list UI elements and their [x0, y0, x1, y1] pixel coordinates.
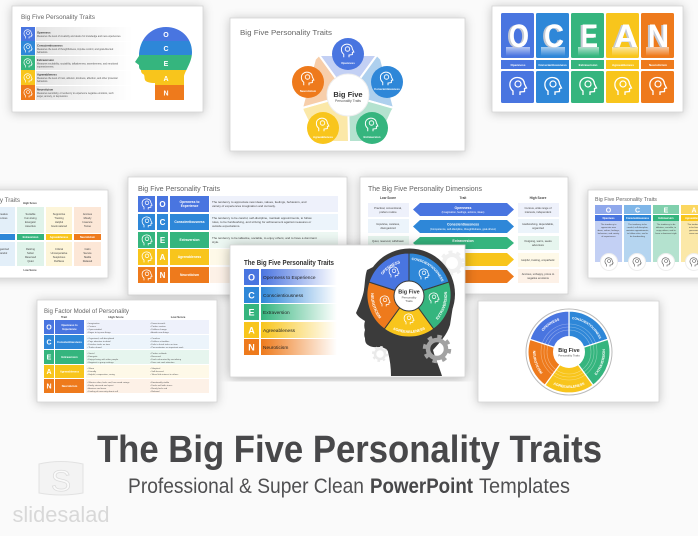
head silhouette — [356, 249, 455, 376]
trait circle: agreeableness — [307, 112, 339, 144]
gradient trait bars: Agreeableness — [263, 328, 296, 334]
row bullets: • Thinks ahead — [87, 347, 102, 349]
score text: Quiet, reserved, withdrawn — [372, 239, 404, 243]
score labels: Agreeableness — [50, 235, 69, 239]
panel: slide circular wheel — [472, 296, 664, 408]
OCEAN letters on head: A — [163, 76, 169, 83]
segment labels: CONSCIENTIOUSNESS — [572, 317, 602, 339]
row bullets: • Dislikes schedules — [150, 341, 170, 343]
column labels — [511, 63, 667, 67]
card text: maintain appointments, — [626, 229, 649, 232]
card text: careful, self-discipline, — [627, 226, 649, 229]
OCEAN letter boxes — [244, 269, 259, 355]
score text: Outgoing, warm, seeks — [524, 239, 552, 243]
large OCEAN letters with 3D edge: E — [581, 18, 598, 54]
score labels: Fun-loving — [24, 216, 37, 220]
score labels: Anxious — [83, 212, 93, 216]
OCEAN letter boxes: N — [248, 342, 255, 352]
card text: behaviors, and variety — [598, 232, 620, 235]
segment labels — [533, 317, 605, 388]
score labels: Suspicious — [53, 255, 66, 259]
row names: Conscientiousness — [57, 340, 82, 344]
score labels: Relaxed — [83, 259, 93, 263]
large OCEAN letters with 3D edge: N — [646, 18, 667, 54]
row bullets: • Down-to-earth — [150, 322, 166, 325]
card text: ideas, values, feelings, — [597, 230, 620, 232]
row bullets: • Rarely feels sad — [150, 387, 168, 390]
OCEAN letters on head: N — [163, 90, 169, 98]
row bullets: • Open-minded — [87, 329, 102, 331]
row bullets: • Self-focused — [150, 371, 164, 373]
card letters: C — [635, 208, 640, 214]
card letters: O — [606, 208, 612, 214]
score labels: Trusting — [54, 216, 64, 220]
trait list with icons: Agreeableness — [37, 72, 57, 76]
row bullets: • Takes little interest in others — [150, 373, 179, 376]
score labels: Tense — [84, 224, 92, 228]
table rows — [138, 196, 338, 283]
score labels: Low Score — [23, 268, 37, 272]
large OCEAN letters with 3D edge: A — [614, 18, 638, 54]
row bullets: • Curious — [87, 325, 97, 328]
row descriptions: variety of experiences imagination and curiosity. — [212, 204, 276, 208]
wheel hub: Personality — [402, 296, 417, 300]
row bullets: • Warm — [87, 367, 94, 370]
card letters: A — [691, 208, 697, 214]
score labels: Extraversion — [23, 235, 39, 239]
column tiles — [501, 13, 674, 103]
row names — [57, 323, 82, 388]
card text: The tendency to be — [657, 223, 676, 226]
segment labels: OPENNESS — [542, 318, 560, 331]
card labels: Extraversion — [658, 217, 674, 220]
subtitle — [128, 475, 570, 498]
arrow labels: Openness — [455, 206, 472, 210]
score columns — [0, 207, 101, 266]
wheel segment icons — [380, 267, 439, 324]
card text: talkative, sociable, to — [656, 226, 677, 229]
column headers: Low Score — [380, 196, 396, 200]
wheel segment labels: AGREEABLENESS — [392, 327, 425, 333]
panel: slide OCEAN cards (cropped at right) — [588, 190, 698, 278]
large OCEAN letters with 3D edge: N — [648, 18, 669, 54]
score labels: Critical — [55, 247, 63, 251]
score labels — [0, 201, 96, 272]
row bullets: • Feels exhausted by socializing — [150, 358, 182, 361]
card labels: Openness — [602, 217, 615, 220]
panel: slide OCEAN columns — [492, 6, 683, 112]
center hub: Big Five — [558, 348, 580, 354]
center hub — [553, 336, 585, 368]
trait circle: agreeableness: Agreeableness — [313, 135, 333, 139]
row descriptions: The tendency to appreciate new ideas, values, feelings, behaviors, and — [212, 200, 307, 204]
wheel segments — [528, 311, 610, 393]
row bullets: • Easily stressed and upset — [87, 384, 114, 387]
row bullets: • Emotionally stable — [150, 381, 170, 384]
row names: Experience — [62, 327, 77, 331]
trait circle: neuroticism: Neuroticism — [300, 89, 317, 93]
row bullets: • Happiest in group settings — [87, 361, 115, 364]
score labels: Sociable — [26, 212, 36, 216]
column headers: High Score — [108, 315, 124, 319]
row bullets: • Enjoys being with other people — [87, 358, 119, 361]
trait circle: extraversion — [356, 112, 388, 144]
wheel hub: Traits — [405, 299, 413, 303]
card text: appreciate new — [601, 226, 616, 229]
trait circle: extraversion: Extraversion — [364, 135, 381, 139]
row letters: A — [46, 369, 52, 376]
row bullets: • Prefers solitude — [150, 352, 167, 355]
row bullets: • Eager to try new things — [87, 331, 112, 334]
row letters: C — [46, 340, 52, 346]
score text: prefers routine — [379, 210, 397, 214]
row bullets: • Energetic — [87, 355, 99, 358]
panel: slide pentagon diagram — [230, 18, 465, 151]
center hub: Personality Traits — [558, 354, 580, 358]
panel: slide personality dimensions — [360, 177, 568, 294]
column headers: Low Score — [171, 315, 186, 319]
panel: slide big factor model — [37, 300, 217, 402]
trait circle: openness: Openness — [341, 61, 355, 65]
column headers — [380, 196, 547, 200]
row letters — [46, 324, 52, 390]
row descriptions: rules, to be hardworking, and striving for achievement against measures or — [212, 220, 311, 224]
row names: Experience — [181, 204, 198, 208]
arrow labels — [430, 206, 496, 243]
row names — [174, 200, 205, 277]
row bullets: • Deals well with stress — [150, 384, 173, 387]
wheel segment labels: EXTRAVERSION — [436, 292, 448, 320]
row icons — [142, 199, 152, 280]
score labels: Ruthless — [54, 259, 65, 263]
gears — [373, 252, 463, 362]
segment labels: AGREEABLENESS — [553, 382, 584, 388]
trait list with icons: behaviors. — [37, 80, 48, 83]
trait arrows — [413, 203, 514, 283]
arrow labels: Extraversion — [452, 239, 474, 243]
gradient trait bars: Extraversion — [263, 310, 290, 316]
row names: Neuroticism — [180, 273, 199, 277]
score labels: Helpful — [55, 220, 63, 224]
row bullets: • Avoids new things — [150, 331, 170, 334]
column icons — [510, 78, 666, 95]
trait circle: openness — [332, 38, 364, 70]
OCEAN letters on head — [163, 32, 169, 98]
large OCEAN letters with 3D edge: O — [509, 18, 529, 54]
card labels: Conscientiousness — [626, 217, 650, 220]
score text: disorganized — [380, 226, 396, 230]
row bullets: • Prefers routine — [150, 325, 167, 328]
slide heading: Big Five Personality Traits — [240, 28, 332, 37]
OCEAN letter boxes: A — [248, 326, 255, 336]
row descriptions: The tendency to be talkative, sociable, to enjoy others; and to have a dominant — [212, 236, 317, 240]
column headers: Trait — [61, 315, 67, 319]
row letters: N — [46, 384, 52, 390]
column labels: Extraversion — [579, 63, 597, 67]
column labels: Conscientiousness — [538, 63, 567, 67]
row names: Extraversion — [180, 238, 199, 242]
panel: slide trait scores (cropped at left) — [0, 190, 108, 278]
row names: Conscientiousness — [174, 220, 205, 224]
center hub: Big Five — [333, 90, 363, 99]
row bullets: • Finishes tasks on time — [87, 343, 111, 346]
panel: slide head with OCEAN bands — [12, 6, 203, 112]
column labels: Openness — [511, 63, 526, 67]
score labels: Retiring — [26, 247, 36, 251]
OCEAN letter boxes: O — [248, 272, 255, 282]
score text: Curious, wide range of — [525, 206, 552, 210]
center hub — [327, 74, 369, 116]
trait circle: conscientiousness — [371, 66, 403, 98]
score labels: Reserved — [25, 255, 37, 259]
row descriptions: outside expectations. — [212, 224, 240, 228]
score labels: High Score — [23, 201, 37, 205]
large OCEAN letters with 3D edge: O — [507, 18, 527, 54]
score text: Practical, conventional, — [374, 206, 402, 210]
subtitle: Professional & Super Clean — [128, 475, 364, 498]
trait list with icons: Extraversion — [37, 58, 54, 62]
row bullets — [87, 322, 184, 393]
trait circle: conscientiousness: Conscientiousness — [374, 87, 400, 91]
card icons — [600, 254, 698, 270]
OCEAN letters on head: C — [163, 46, 169, 53]
high score boxes — [518, 203, 559, 283]
trait list with icons — [21, 27, 132, 100]
slide heading: The Big Five Personality Dimensions — [368, 186, 482, 193]
card text: have a dominant style — [655, 232, 677, 235]
slide heading: Big Five Personality Traits — [595, 197, 658, 203]
trait list with icons: behaviors. — [37, 51, 48, 54]
score text: adventure — [532, 243, 544, 247]
card text: be hardworking — [630, 235, 646, 238]
wheel segment labels — [370, 258, 448, 333]
row bullets: • Reserved — [150, 355, 162, 358]
trait list with icons: expressiveness. — [37, 66, 54, 68]
large OCEAN letters with 3D edge: C — [542, 18, 562, 54]
row bullets: • Dislikes change — [150, 329, 167, 331]
column headers: High Score — [530, 196, 547, 200]
subtitle: Templates — [479, 475, 570, 498]
column headers: Trait — [460, 196, 467, 200]
card letters — [606, 208, 697, 214]
row names: Agreeableness — [60, 370, 80, 374]
row names: Extraversion — [61, 355, 78, 359]
row bullets: • Friendly — [87, 370, 97, 373]
trait list with icons: anger, anxiety, or depression. — [37, 95, 69, 98]
score labels: Uncooperative — [51, 251, 68, 255]
column headers — [61, 315, 186, 319]
large OCEAN letters with 3D edge: E — [579, 18, 596, 54]
row bullets: • Relaxed — [150, 391, 160, 393]
wheel hub — [394, 281, 424, 311]
row letters: C — [160, 218, 166, 227]
score labels: Calm — [84, 247, 91, 251]
score text: negative emotions — [527, 276, 550, 280]
trait list with icons: Openness — [37, 30, 51, 34]
card labels — [602, 217, 698, 220]
score text: Helpful, trusting, empathetic — [521, 258, 555, 262]
trait cards — [595, 205, 698, 262]
gradient trait bars — [261, 269, 337, 355]
OCEAN letter boxes: C — [248, 290, 255, 300]
gradient trait bars: Conscientiousness — [263, 293, 304, 299]
panel: slide OCEAN table — [128, 177, 347, 295]
large OCEAN letters with 3D edge: C — [544, 18, 564, 54]
row bullets: • Helpful, cooperative, caring — [87, 373, 116, 376]
brain wheel — [364, 248, 455, 336]
row bullets: • Skeptical — [150, 367, 161, 370]
large OCEAN letters with 3D edge — [506, 18, 669, 56]
row bullets: • Anxious and tense — [87, 387, 107, 390]
row names: Neuroticism — [62, 384, 78, 388]
score labels: Neuroticism — [80, 235, 96, 239]
row letters: N — [160, 271, 166, 280]
pale detail arcs in segments — [541, 324, 597, 380]
column labels: Neuroticism — [649, 63, 667, 67]
score text — [372, 206, 555, 280]
row letters: O — [159, 200, 166, 209]
row names: Agreeableness — [178, 255, 201, 259]
score labels: Stable — [84, 255, 92, 259]
segment labels: NEUROTICISM — [533, 350, 543, 374]
score labels: Assertive — [25, 224, 36, 228]
row bullets: • Feeling of insecurity about self — [87, 390, 118, 393]
OCEAN letters on head: E — [164, 61, 169, 68]
wheel segment labels: NEUROTICISM — [370, 293, 382, 318]
slide heading: Big Factor Model of Personality — [44, 308, 130, 315]
row bullets: • Social — [87, 353, 95, 355]
row bullets: • Pays attention to detail — [87, 340, 111, 343]
wheel segment labels: OPENNESS — [381, 260, 400, 274]
row letters: E — [47, 354, 52, 362]
segment labels: EXTRAVERSION — [594, 349, 605, 376]
main title: The Big Five Personality Traits — [97, 429, 602, 471]
score labels: Good-natured — [51, 224, 68, 228]
score labels: Supportive — [53, 212, 66, 216]
gradient trait bars: Openness to Experience — [263, 275, 316, 281]
logo: slidesalad: S — [51, 465, 71, 498]
row descriptions: The tendency to be careful, self-discipline, maintain appointments, to follow — [212, 216, 313, 220]
center hub: Personality Traits — [335, 99, 361, 103]
score labels: Moody — [84, 216, 92, 220]
card text: The tendency to — [601, 223, 617, 226]
score text: interests, independent — [525, 210, 551, 214]
trait list with icons: Measures the level of trust, altruism, kindness, affection, and other prosocial — [37, 77, 118, 80]
trait list with icons: Measures the level of thoughtfulness, impulse control, and goal-directed — [37, 48, 114, 51]
row names: Openness to — [180, 200, 199, 204]
card text: The tendency to be — [628, 223, 648, 226]
table rows — [44, 320, 209, 393]
logo: slidesalad: slidesalad — [12, 502, 110, 527]
trait list with icons: Conscientiousness — [37, 44, 63, 48]
row bullets: • Careless — [150, 337, 161, 340]
row bullets: • Worries often, feels sad, has mood swings — [87, 381, 130, 384]
row letters: A — [160, 253, 166, 262]
row bullets: • Organized, self-disciplined — [87, 337, 115, 340]
outer ring — [526, 309, 612, 395]
pentagon segments — [302, 55, 394, 142]
arrow labels: Conscientiousness — [447, 222, 479, 226]
trait circle: neuroticism — [292, 66, 324, 98]
row bullets: • Does not seek attention — [150, 361, 175, 364]
row letters: E — [160, 236, 166, 245]
trait list with icons: Measures the level of creativity and desire for knowledge and new experiences. — [37, 35, 121, 38]
arrow labels: (Imagination, feelings, actions, ideas) — [442, 210, 485, 214]
logo: slidesalad — [12, 462, 110, 527]
card text: of experiences — [601, 235, 617, 238]
trait list with icons: Neuroticism — [37, 88, 54, 92]
slide heading: The Big Five Personality Traits — [244, 260, 334, 267]
wheel hub: Big Five — [398, 290, 420, 296]
OCEAN letter boxes: E — [248, 308, 255, 318]
score labels: Secure — [83, 251, 92, 255]
trait list with icons: Measures excitability, sociability, talkativeness, assertiveness, and emotional — [37, 62, 118, 66]
score labels: Energetic — [25, 220, 37, 224]
row names: Openness to — [61, 323, 78, 327]
large OCEAN letters with 3D edge: A — [612, 18, 636, 54]
row bullets: • Fails to finish tasks on time — [150, 343, 178, 346]
row letters — [159, 200, 166, 280]
row bullets: • Imaginative — [87, 322, 100, 325]
column labels: Agreeableness — [612, 63, 634, 67]
score text: Hardworking, dependable, — [522, 222, 554, 226]
card text: enjoy others; and to — [656, 229, 676, 232]
score labels: Quiet — [27, 259, 34, 263]
trait list with icons: Measures sensitivity, or tendency to experience negative emotions, such — [37, 92, 114, 95]
score text: Impulsive, careless, — [376, 222, 400, 226]
OCEAN letters on head: O — [163, 32, 169, 39]
card letters: E — [664, 208, 669, 214]
gradient trait bars: Neuroticism — [263, 345, 288, 351]
score text: Anxious, unhappy, prone to — [522, 272, 555, 276]
low score boxes — [368, 203, 409, 283]
card text: to follow rules, and to — [627, 232, 649, 235]
head with OCEAN bands — [135, 27, 192, 100]
slide heading: Big Five Personality Traits — [21, 14, 96, 21]
subtitle: PowerPoint — [370, 475, 473, 498]
score text: organized — [532, 226, 544, 230]
panel: featured slide with head wheel — [222, 238, 473, 382]
arrow labels: (Competence, self-discipline, thoughtfulness, goal-driven) — [430, 227, 496, 231]
card text — [597, 223, 698, 238]
row descriptions: style. — [212, 240, 219, 244]
row bullets: • Procrastinates on important work — [150, 346, 184, 349]
score labels: Insecure — [83, 220, 93, 224]
row descriptions — [212, 200, 317, 244]
row letters: O — [46, 324, 52, 332]
score labels: Sober — [27, 251, 34, 255]
slide heading: Big Five Personality Traits — [138, 186, 221, 193]
wheel segment labels: CONSCIENTIOUSNESS — [412, 258, 444, 282]
